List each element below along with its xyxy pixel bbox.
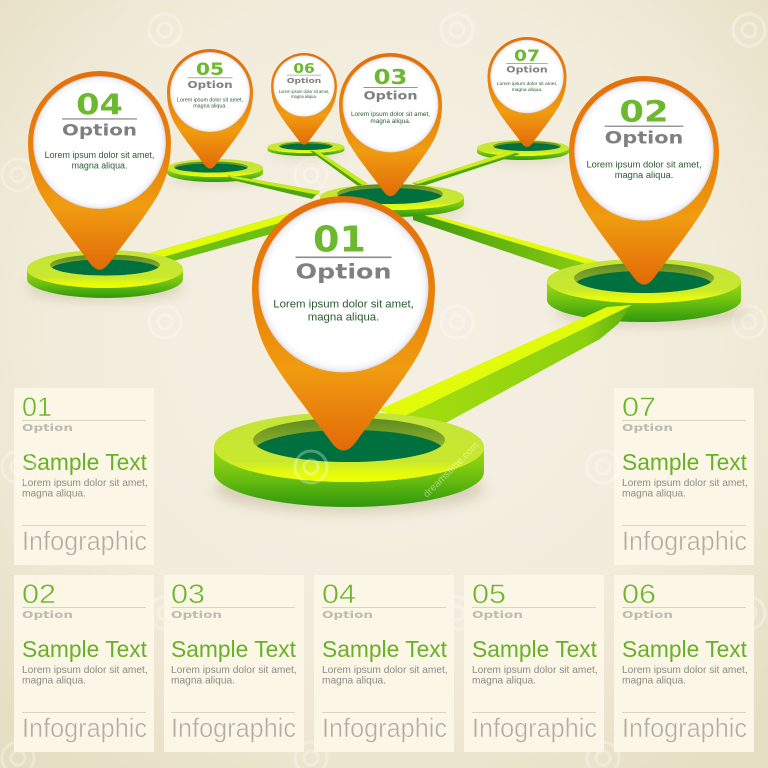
pin 07 number: 07	[514, 47, 540, 65]
card 04 footer: Infographic	[322, 713, 447, 743]
card 03 body: magna aliqua.	[171, 676, 235, 686]
panel: card 06	[614, 575, 754, 752]
card 03 heading: Sample Text	[171, 636, 297, 662]
panel: card 01	[14, 388, 154, 565]
card 07 body: Lorem ipsum dolor sit amet,	[622, 478, 748, 489]
watermark text: dreamstime.com	[421, 440, 481, 500]
pin 05 body text: Lorem ipsum dolor sit amet,	[177, 97, 243, 103]
node: ring 06	[268, 141, 344, 156]
card 06 body: magna aliqua.	[622, 676, 686, 686]
card 01 footer: Infographic	[22, 526, 147, 556]
card 02 heading: Sample Text	[22, 636, 148, 662]
pin 03 number: 03	[374, 65, 407, 89]
node: ring 02	[547, 259, 741, 322]
card 04 body: magna aliqua.	[322, 676, 386, 686]
card 03 number: 03	[171, 579, 205, 609]
pin 06	[271, 53, 337, 145]
pin 05 number: 05	[196, 59, 224, 79]
card 05 number: 05	[472, 579, 506, 609]
pin 01 body text: magna aliqua.	[308, 312, 379, 324]
panel: card 03	[164, 575, 304, 752]
card 01 body: magna aliqua.	[22, 488, 86, 500]
card 06 number: 06	[622, 579, 656, 609]
pin 06 body text: Lorem ipsum dolor sit amet,	[279, 89, 329, 94]
pin 03 body text: Lorem ipsum dolor sit amet,	[351, 111, 430, 118]
pin 01 body text: Lorem ipsum dolor sit amet,	[273, 298, 414, 310]
connector: 03 to 05	[228, 175, 320, 199]
card 05 body: magna aliqua.	[472, 676, 536, 686]
panel: card 04	[314, 575, 454, 752]
pin 02 label: Option	[605, 129, 683, 148]
pin 02 body text: magna aliqua.	[615, 170, 673, 180]
pin 02 body text: Lorem ipsum dolor sit amet,	[586, 159, 702, 169]
card 05 heading: Sample Text	[472, 636, 598, 662]
panel: card 05	[464, 575, 604, 752]
card 02 number: 02	[22, 579, 56, 609]
pin 02	[569, 76, 719, 285]
card 06 body: Lorem ipsum dolor sit amet,	[622, 665, 748, 676]
connector: 03 to 02	[408, 208, 600, 275]
pin 04	[28, 71, 171, 270]
card 04 body: Lorem ipsum dolor sit amet,	[322, 665, 448, 676]
card 06 footer: Infographic	[622, 713, 747, 743]
card 02 body: Lorem ipsum dolor sit amet,	[22, 665, 148, 676]
connector: 03 to 07	[412, 151, 520, 187]
card 01 option: Option	[22, 423, 73, 434]
card 07 heading: Sample Text	[622, 449, 748, 475]
node: ring 05	[167, 159, 263, 182]
pin 04 label: Option	[62, 121, 137, 139]
ground shadows	[27, 149, 745, 513]
card 01 body: Lorem ipsum dolor sit amet,	[22, 478, 148, 489]
pin 06 label: Option	[287, 76, 321, 85]
pin 04 body text: magna aliqua.	[72, 160, 127, 170]
watermark spirals over ring and cards	[2, 451, 619, 483]
pin 03 body text: magna aliqua.	[370, 118, 411, 125]
card 07 body: magna aliqua.	[622, 488, 686, 500]
card 01 heading: Sample Text	[22, 449, 148, 475]
pin 05 label: Option	[187, 80, 233, 91]
pin 03	[339, 53, 442, 196]
pin 05 body text: magna aliqua.	[193, 104, 227, 110]
card 03 option: Option	[171, 610, 222, 621]
pin 02 number: 02	[619, 94, 669, 128]
pin 07 label: Option	[506, 66, 548, 76]
node: ring 07	[477, 140, 569, 160]
card 04 number: 04	[322, 579, 356, 609]
node: ring 01	[214, 412, 484, 507]
pin 06 body text: magna aliqua.	[291, 94, 317, 99]
pin 07 body text: Lorem ipsum dolor sit amet,	[497, 82, 557, 87]
card 03 footer: Infographic	[171, 713, 296, 743]
panel: card 02	[14, 575, 154, 752]
pin 06 number: 06	[293, 62, 315, 77]
card 04 heading: Sample Text	[322, 636, 448, 662]
card 02 footer: Infographic	[22, 713, 147, 743]
card 05 footer: Infographic	[472, 713, 597, 743]
node: ring 03	[320, 184, 464, 217]
pin 01 number: 01	[313, 220, 366, 260]
connector: 01 to 02	[378, 305, 632, 426]
pin 07 body text: magna aliqua.	[512, 87, 542, 93]
pin 04 body text: Lorem ipsum dolor sit amet,	[45, 150, 154, 160]
card 06 heading: Sample Text	[622, 636, 748, 662]
card 04 option: Option	[322, 610, 373, 621]
pin 05	[167, 49, 253, 169]
card 07 option: Option	[622, 423, 673, 434]
card 06 option: Option	[622, 610, 673, 621]
pin 01 label: Option	[296, 260, 392, 284]
pin 03 label: Option	[363, 89, 418, 102]
card 07 footer: Infographic	[622, 526, 747, 556]
pin 07	[487, 37, 567, 147]
card 05 body: Lorem ipsum dolor sit amet,	[472, 665, 598, 676]
card 03 body: Lorem ipsum dolor sit amet,	[171, 665, 297, 676]
panel: card 07	[614, 388, 754, 565]
card 07 number: 07	[622, 392, 656, 422]
card 01 number: 01	[22, 392, 52, 422]
connector: 04 to 03	[150, 210, 300, 262]
node: ring 04	[27, 250, 183, 298]
connector: 03 to 06	[310, 151, 368, 186]
pin 04 number: 04	[76, 88, 123, 121]
card 02 body: magna aliqua.	[22, 676, 86, 686]
card 02 option: Option	[22, 610, 73, 621]
pin 01	[252, 196, 435, 450]
card 05 option: Option	[472, 610, 523, 621]
